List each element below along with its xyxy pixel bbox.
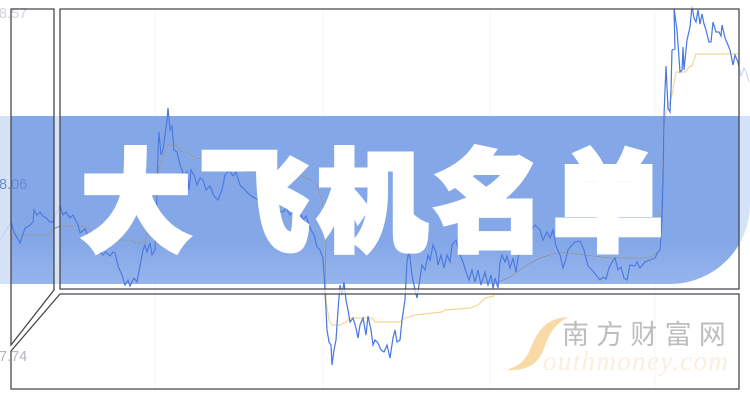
- logo: domain: outhmoney.com: [543, 346, 729, 376]
- moving average line, faded: [11, 54, 750, 325]
- band: blue strip inside frames: [0, 116, 750, 284]
- band: light background strip: [0, 116, 750, 284]
- logo: chinese name: 南方财富网: [562, 320, 733, 350]
- faint grid lines: [155, 10, 655, 390]
- logo: southmoney watermark: [506, 317, 733, 376]
- axis labels: [0, 6, 27, 365]
- icon: orange swoosh: [506, 317, 568, 370]
- title: 大飞机名单: [81, 143, 671, 266]
- moving average line over band: [12, 116, 666, 284]
